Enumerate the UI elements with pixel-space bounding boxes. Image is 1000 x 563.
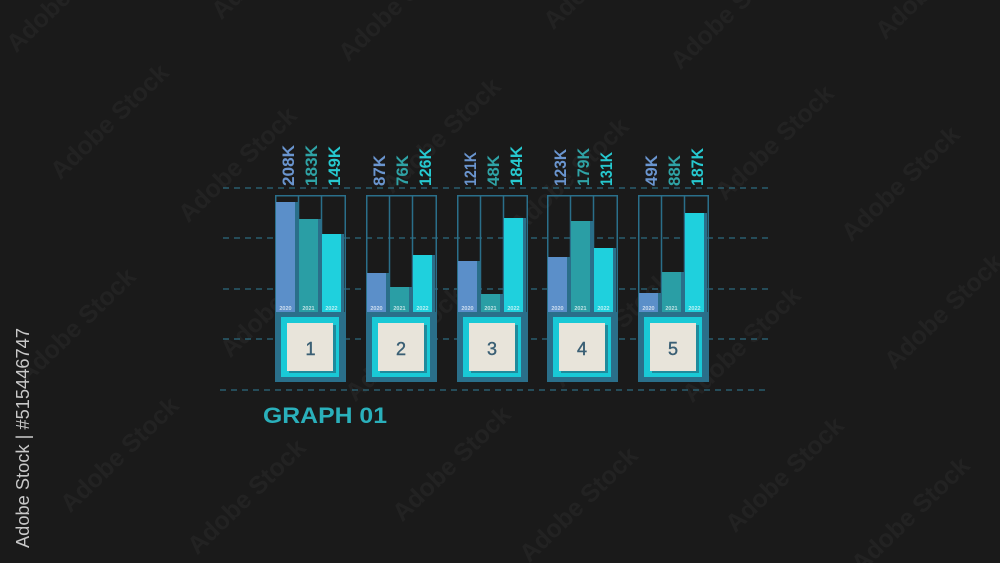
watermarks: Adobe Stock xyxy=(505,113,634,239)
value labels group 1: 149K xyxy=(325,145,344,186)
number 1: 1 xyxy=(305,339,316,359)
watermarks: Adobe Stock xyxy=(55,392,184,518)
value labels group 3 xyxy=(461,145,526,186)
watermarks: Adobe Stock xyxy=(12,263,141,389)
bars group 3: 2020 xyxy=(461,306,474,312)
value labels group 4: 123K xyxy=(551,148,570,186)
number 2: 2 xyxy=(396,339,406,359)
bars group 5 xyxy=(639,213,707,312)
stock id side text: Adobe Stock | #515446747 xyxy=(12,328,33,548)
value labels group 2 xyxy=(370,147,435,186)
panel: group 5 xyxy=(638,147,709,382)
bars group 2: 2021 xyxy=(393,306,406,312)
panel: group 2 xyxy=(366,147,437,382)
bars group 4 xyxy=(548,221,616,312)
watermarks: Adobe Stock xyxy=(173,102,302,228)
value labels group 2: 87K xyxy=(370,154,389,186)
bars group 1: 2022 xyxy=(325,306,338,312)
value labels group 1: 208K xyxy=(279,144,298,186)
bars group 4: 2020 xyxy=(551,306,564,312)
value labels group 4: 179K xyxy=(574,147,593,186)
watermarks: Adobe Stock xyxy=(710,80,839,206)
value labels group 4: 131K xyxy=(597,151,616,186)
watermarks: Adobe Stock xyxy=(387,401,516,527)
watermarks: Adobe Stock xyxy=(377,73,506,199)
value labels group 3: 48K xyxy=(484,154,503,186)
value labels group 1 xyxy=(279,144,344,186)
bars group 2: 2022 xyxy=(416,306,429,312)
bars group 5: 2020 xyxy=(642,306,655,312)
watermarks: Adobe Stock xyxy=(547,267,676,393)
watermarks: Adobe Stock xyxy=(45,59,174,185)
watermarks: Adobe Stock xyxy=(677,282,806,408)
dashed grid lines xyxy=(220,188,772,390)
bars group 2: 2020 xyxy=(370,306,383,312)
value labels group 5: 88K xyxy=(665,154,684,186)
bars group 1: 2021 xyxy=(302,306,315,312)
value labels group 3: 121K xyxy=(461,151,480,186)
watermarks: Adobe Stock xyxy=(182,434,311,560)
bars group 2 xyxy=(367,255,435,312)
value labels group 3: 184K xyxy=(507,145,526,186)
value labels group 5: 187K xyxy=(688,147,707,186)
watermarks: Adobe Stock xyxy=(836,121,965,247)
bars group 3 xyxy=(458,218,526,312)
value labels group 5 xyxy=(642,147,707,186)
title: GRAPH 01 xyxy=(263,403,387,428)
value labels group 5: 49K xyxy=(642,154,661,186)
number 3: 3 xyxy=(487,339,497,359)
number 4: 4 xyxy=(577,339,587,359)
bars group 5: 2022 xyxy=(688,306,701,312)
bars group 4: 2021 xyxy=(574,306,587,312)
number 5: 5 xyxy=(668,339,678,359)
panel: group 3 xyxy=(457,145,528,382)
bars group 1: 2020 xyxy=(279,306,292,312)
watermarks: Adobe Stock xyxy=(215,237,344,363)
watermarks: Adobe Stock xyxy=(720,412,849,538)
value labels group 2: 76K xyxy=(393,154,412,186)
watermarks: Adobe Stock xyxy=(340,281,469,407)
bars group 5: 2021 xyxy=(665,306,678,312)
bars group 1 xyxy=(276,202,344,312)
bars group 3: 2022 xyxy=(507,306,520,312)
panel: group 1 xyxy=(275,144,346,382)
bars group 3: 2021 xyxy=(484,306,497,312)
panel: group 4 xyxy=(547,147,618,382)
value labels group 1: 183K xyxy=(302,144,321,186)
value labels group 2: 126K xyxy=(416,147,435,186)
bars group 4: 2022 xyxy=(597,306,610,312)
value labels group 4 xyxy=(551,147,616,186)
